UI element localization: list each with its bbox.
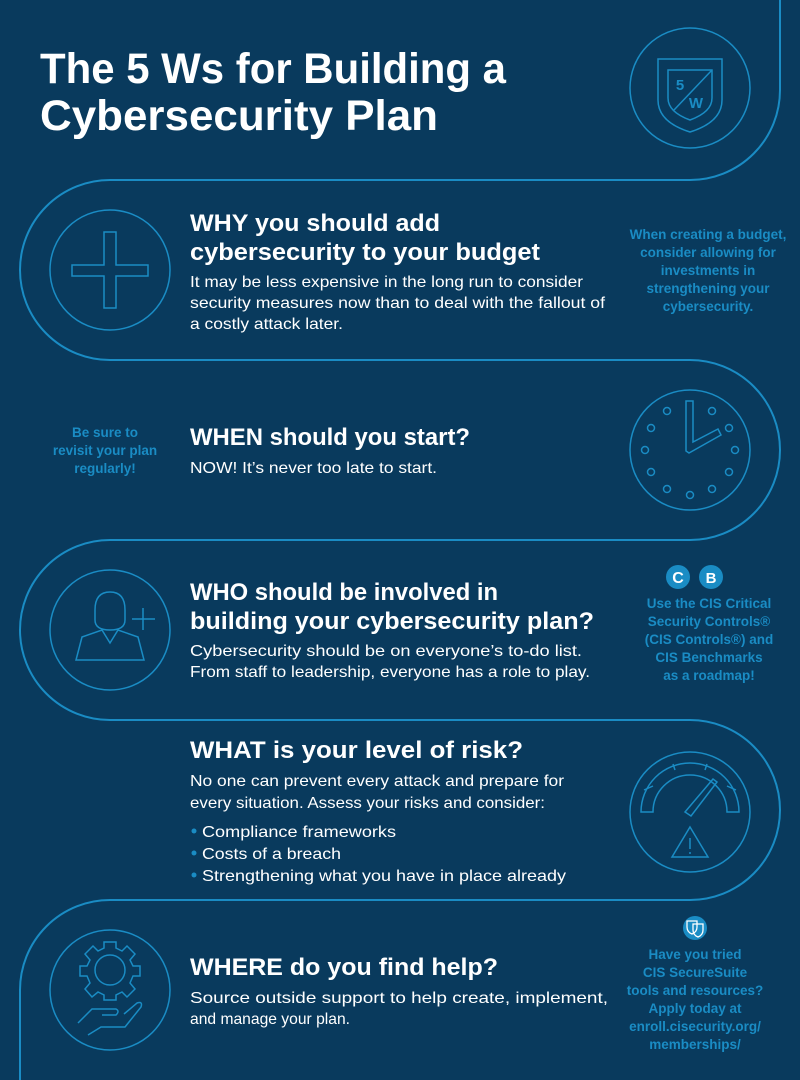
icon: 5W shield: 5 — [676, 77, 684, 94]
note: CIS controls: (CIS Controls®) and — [645, 632, 773, 647]
section: WHY — [190, 210, 606, 333]
note: SecureSuite: Have you tried — [648, 947, 742, 962]
section: WHO: WHO should be involved in — [190, 579, 498, 606]
note: budget: strengthening your — [646, 281, 770, 296]
section: WHEN — [190, 424, 470, 477]
section: WHAT: Strengthening what you have in place already — [202, 868, 566, 885]
section: WHAT: every situation. Assess your risks and consider: — [190, 795, 545, 812]
section: WHY: It may be less expensive in the long run to consider — [190, 274, 584, 291]
icon: clock — [630, 390, 750, 510]
note: budget: consider allowing for — [640, 245, 777, 260]
title — [40, 45, 507, 140]
section: WHY: WHY you should add — [190, 210, 440, 237]
section: WHY: security measures now than to deal with the fallout of — [190, 295, 606, 312]
note: CIS controls: Security Controls® — [648, 614, 770, 629]
section: WHEN: NOW! It’s never too late to start. — [190, 460, 437, 477]
section: WHY: cybersecurity to your budget — [190, 239, 540, 266]
icon: person plus — [50, 570, 170, 690]
icon: 5W shield: W — [689, 95, 704, 112]
note: CIS controls: Use the CIS Critical — [647, 596, 771, 611]
note: revisit: revisit your plan — [53, 443, 157, 458]
section: WHAT: Costs of a breach — [202, 846, 341, 863]
section: WHERE: and manage your plan. — [190, 1011, 350, 1028]
note: SecureSuite: CIS SecureSuite — [643, 965, 748, 980]
icon: SecureSuite — [683, 916, 707, 940]
title: The 5 Ws for Building a — [40, 45, 507, 93]
title: Cybersecurity Plan — [40, 92, 438, 140]
section: WHY: a costly attack later. — [190, 316, 343, 333]
note: CIS controls — [645, 596, 773, 683]
icons: CIS controls and benchmarks — [666, 565, 723, 589]
note: SecureSuite: tools and resources? — [627, 983, 763, 998]
icon: 5W shield — [630, 28, 750, 148]
section: WHEN: WHEN should you start? — [190, 424, 470, 451]
section: WHERE: WHERE do you find help? — [190, 954, 498, 981]
section: WHAT — [190, 737, 566, 885]
section: WHAT: Compliance frameworks — [202, 824, 396, 841]
section: WHAT: WHAT is your level of risk? — [190, 737, 523, 764]
icon: gear in hand — [50, 930, 170, 1050]
section: WHO — [190, 579, 594, 681]
section: WHERE: Source outside support to help create, implement, — [190, 990, 608, 1007]
section: WHO: From staff to leadership, everyone has a role to play. — [190, 664, 590, 681]
note: budget: When creating a budget, — [630, 227, 786, 242]
note: budget: cybersecurity. — [663, 299, 753, 314]
section: WHAT: No one can prevent every attack and prepare for — [190, 773, 565, 790]
section: WHO: Cybersecurity should be on everyone’s to-do list. — [190, 643, 582, 660]
note: CIS controls: as a roadmap! — [663, 668, 755, 683]
note: revisit: Be sure to — [72, 425, 138, 440]
icons: CIS controls and benchmarks: C — [672, 570, 684, 587]
note: SecureSuite: Apply today at — [648, 1001, 742, 1016]
note: budget — [630, 227, 786, 314]
icons: CIS controls and benchmarks: B — [706, 570, 717, 587]
note: budget: investments in — [661, 263, 755, 278]
note: revisit: regularly! — [74, 461, 136, 476]
note: CIS controls: CIS Benchmarks — [655, 650, 763, 665]
note: SecureSuite: memberships/ — [649, 1037, 741, 1052]
note: SecureSuite — [627, 947, 763, 1052]
icon: risk gauge — [630, 752, 750, 872]
note: revisit — [53, 425, 157, 476]
section: WHO: building your cybersecurity plan? — [190, 608, 594, 635]
section: WHERE — [190, 954, 608, 1028]
note: SecureSuite: enroll.cisecurity.org/ — [629, 1019, 761, 1034]
icon: plus — [50, 210, 170, 330]
